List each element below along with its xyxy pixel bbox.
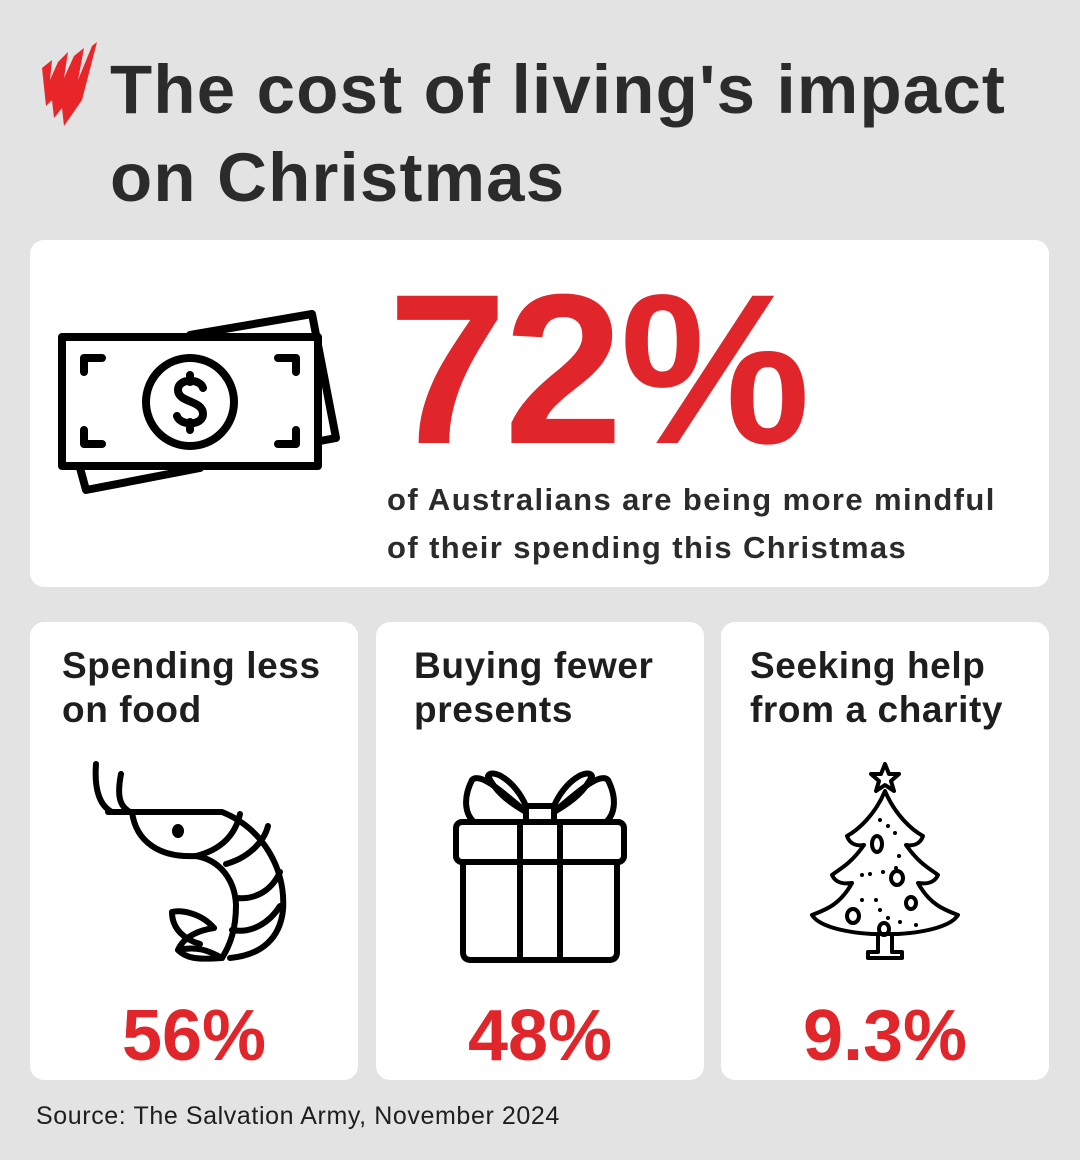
heading: presents	[414, 689, 573, 730]
percentage: 56%	[122, 996, 266, 1076]
icon: gift	[453, 770, 627, 963]
panel: presents	[376, 622, 704, 1080]
title: on Christmas	[110, 139, 565, 216]
percentage: 48%	[468, 996, 612, 1076]
panel: charity	[721, 622, 1049, 1080]
heading: on food	[62, 689, 202, 730]
heading: Seeking help	[750, 645, 985, 686]
heading	[750, 645, 1003, 730]
icon: shrimp	[92, 761, 286, 962]
heading	[414, 645, 654, 730]
stat description: of Australians are being more mindful	[387, 482, 996, 517]
icon: tree	[810, 762, 960, 960]
source: Source: The Salvation Army, November 2024	[36, 1102, 560, 1130]
stat description: of their spending this Christmas	[387, 530, 907, 565]
title	[110, 51, 1006, 216]
panel: food	[30, 622, 358, 1080]
icon: money	[58, 310, 340, 494]
percentage: 9.3%	[803, 996, 967, 1076]
stat description	[387, 482, 996, 565]
panel: headline stat	[30, 240, 1049, 587]
heading: Buying fewer	[414, 645, 654, 686]
heading: Spending less	[62, 645, 321, 686]
big stat: 72%	[388, 250, 807, 489]
title: The cost of living's impact	[110, 51, 1006, 128]
heading: from a charity	[750, 689, 1003, 730]
heading	[62, 645, 321, 730]
